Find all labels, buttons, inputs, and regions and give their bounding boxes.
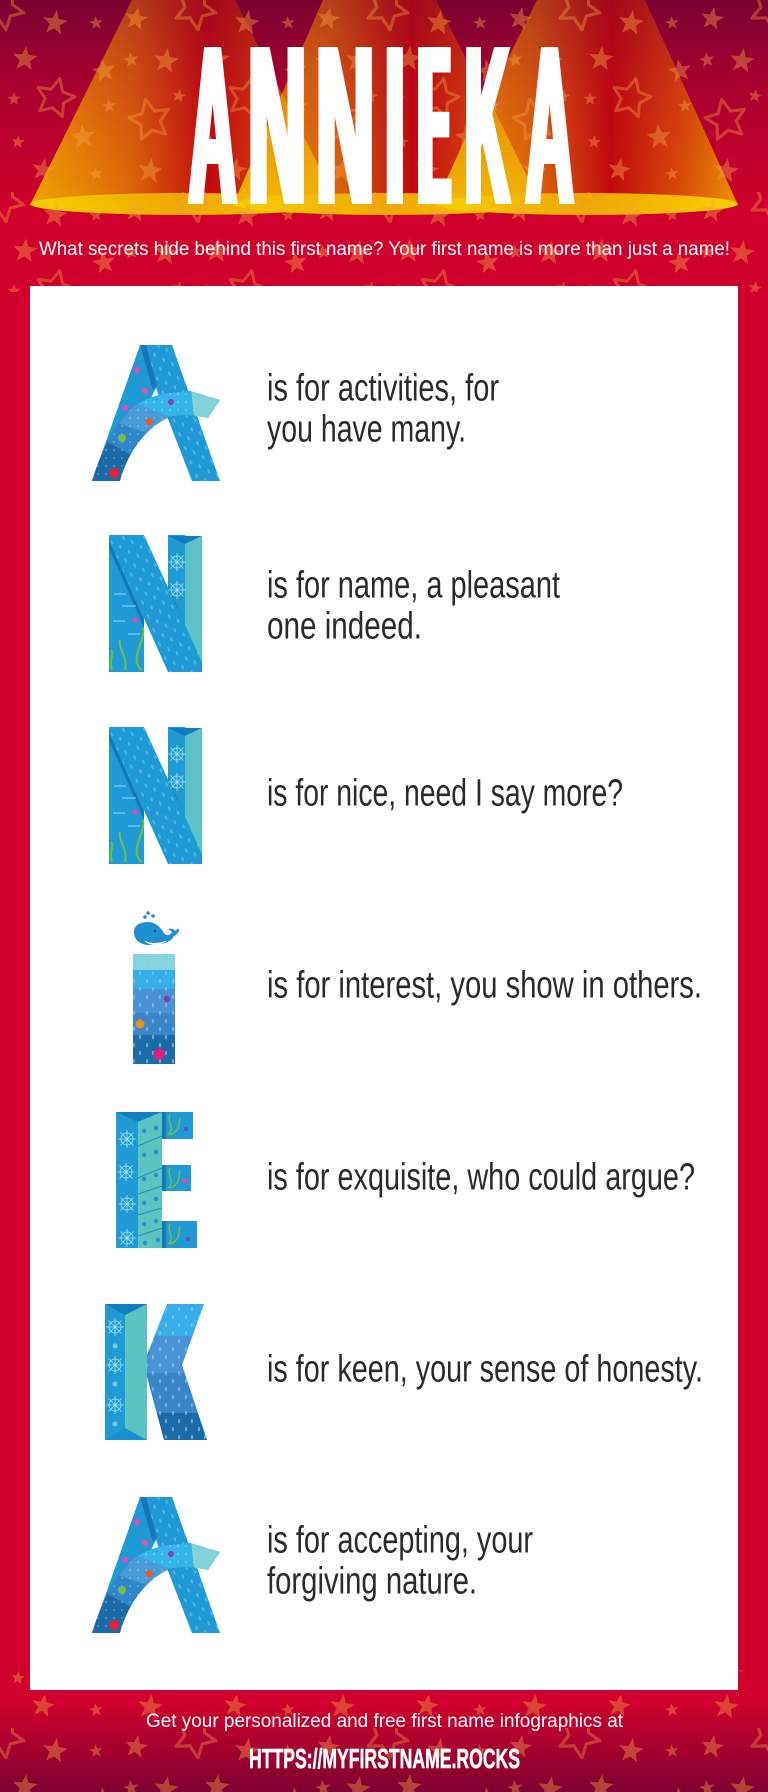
text: N line: one indeed. — [267, 606, 422, 648]
icon: letter N — [109, 535, 202, 672]
text: A line: you have many. — [267, 408, 466, 450]
title — [188, 0, 574, 253]
text: A line — [267, 368, 499, 450]
title: E — [419, 0, 449, 253]
title: N — [316, 0, 375, 253]
text: N line — [267, 564, 560, 648]
text: second N line: is for nice, need I say more? — [267, 772, 623, 814]
text: second A line — [267, 1520, 533, 1602]
icon: letter N second — [109, 727, 202, 864]
icon: letter K — [105, 1304, 210, 1441]
text: N line: is for name, a pleasant — [267, 564, 560, 606]
title: A — [189, 0, 236, 253]
icon: letter A — [85, 345, 230, 485]
footer text: Get your personalized and free first name infographics at — [146, 1711, 624, 1732]
plain side margins — [0, 292, 768, 1670]
panel: letters — [30, 286, 738, 1690]
title: I — [385, 0, 405, 253]
icon: letter A second — [85, 1497, 230, 1637]
title: A — [526, 0, 573, 253]
title: K — [465, 0, 509, 253]
footer url: HTTPS://MYFIRSTNAME.ROCKS — [249, 1743, 520, 1774]
text: second A line: is for accepting, your — [267, 1520, 533, 1562]
stage spotlights — [30, 0, 738, 215]
icon: letter E — [116, 1112, 197, 1248]
text: A line: is for activities, for — [267, 368, 499, 410]
subtitle: What secrets hide behind this first name? Your first name is more than just a name! — [39, 239, 730, 260]
text: second A line: forgiving nature. — [267, 1560, 477, 1602]
icon: whale on letter I — [133, 911, 179, 1064]
title: N — [248, 0, 307, 253]
